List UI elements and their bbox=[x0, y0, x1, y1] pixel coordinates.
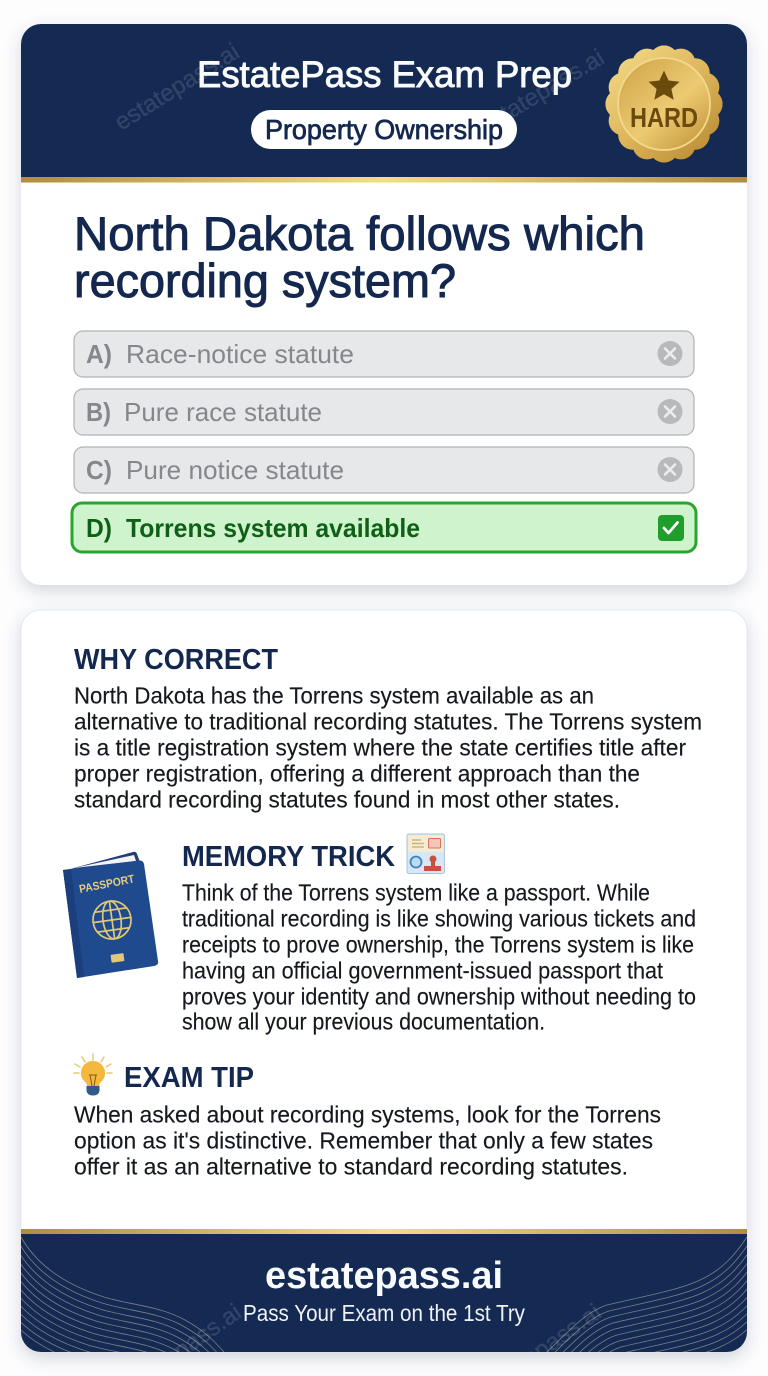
question: recording system? bbox=[74, 255, 456, 308]
footer tagline: Pass Your Exam on the 1st Try bbox=[243, 1300, 525, 1326]
why correct section: WHY CORRECT bbox=[74, 644, 278, 676]
memory trick section: having an official government-issued passport that bbox=[182, 957, 663, 983]
option B bbox=[74, 389, 694, 435]
icon: documents and stamp bbox=[407, 834, 444, 874]
why correct section: proper registration, offering a different approach than the bbox=[74, 760, 640, 786]
why correct section: North Dakota has the Torrens system available as an bbox=[74, 682, 594, 708]
option A: A) bbox=[86, 339, 112, 369]
memory trick section: traditional recording is like showing various tickets and bbox=[182, 905, 696, 931]
header band bbox=[21, 24, 747, 178]
gold divider bbox=[21, 177, 747, 182]
question bbox=[74, 208, 645, 308]
panel: question card bbox=[21, 24, 747, 585]
category pill: Property Ownership bbox=[265, 114, 503, 145]
memory trick section: show all your previous documentation. bbox=[182, 1008, 545, 1034]
exam tip section: option as it's distinctive. Remember that only a few states bbox=[74, 1127, 653, 1153]
option B: Pure race statute bbox=[124, 397, 322, 427]
why correct section: is a title registration system where the state certifies title after bbox=[74, 734, 686, 760]
option C bbox=[74, 447, 694, 493]
exam tip section bbox=[74, 1062, 661, 1179]
memory trick section: receipts to prove ownership, the Torrens system is like bbox=[182, 931, 694, 957]
memory trick section bbox=[182, 834, 696, 1034]
why correct section bbox=[74, 644, 702, 812]
watermark: estatepass.ai bbox=[474, 44, 609, 140]
exam tip section: When asked about recording systems, look for the Torrens bbox=[74, 1101, 661, 1127]
icon: passport: PASSPORT bbox=[78, 873, 136, 896]
footer bbox=[21, 1234, 747, 1352]
option A: Race-notice statute bbox=[126, 339, 354, 369]
exam tip section: offer it as an alternative to standard recording statutes. bbox=[74, 1153, 628, 1179]
title: EstatePass Exam Prep bbox=[197, 54, 572, 95]
memory trick section: proves your identity and ownership without needing to bbox=[182, 983, 696, 1009]
card background bbox=[21, 610, 747, 1352]
option D: correct answer: Torrens system available bbox=[126, 513, 420, 543]
gold divider bbox=[21, 1229, 747, 1235]
memory trick section: Think of the Torrens system like a passport. While bbox=[182, 879, 650, 905]
footer brand: estatepass.ai bbox=[265, 1255, 503, 1297]
badge: hard difficulty: HARD bbox=[630, 102, 698, 133]
why correct section: standard recording statutes found in most other states. bbox=[74, 786, 620, 812]
exam tip section: EXAM TIP bbox=[124, 1062, 254, 1094]
option D: correct answer bbox=[72, 503, 696, 552]
option C: Pure notice statute bbox=[126, 455, 344, 485]
card background bbox=[21, 24, 747, 585]
panel: explanation card bbox=[0, 610, 768, 1376]
watermark: estatepass.ai bbox=[110, 38, 244, 136]
option A bbox=[74, 331, 694, 377]
option C: C) bbox=[86, 455, 112, 485]
why correct section: alternative to traditional recording statutes. The Torrens system bbox=[74, 708, 702, 734]
icon: light bulb bbox=[74, 1054, 112, 1096]
question: North Dakota follows which bbox=[74, 208, 645, 261]
badge: hard difficulty bbox=[605, 45, 723, 163]
option D: correct answer: D) bbox=[86, 513, 112, 543]
option B: B) bbox=[86, 397, 111, 427]
memory trick section: MEMORY TRICK bbox=[182, 841, 395, 873]
icon: passport bbox=[63, 852, 158, 978]
